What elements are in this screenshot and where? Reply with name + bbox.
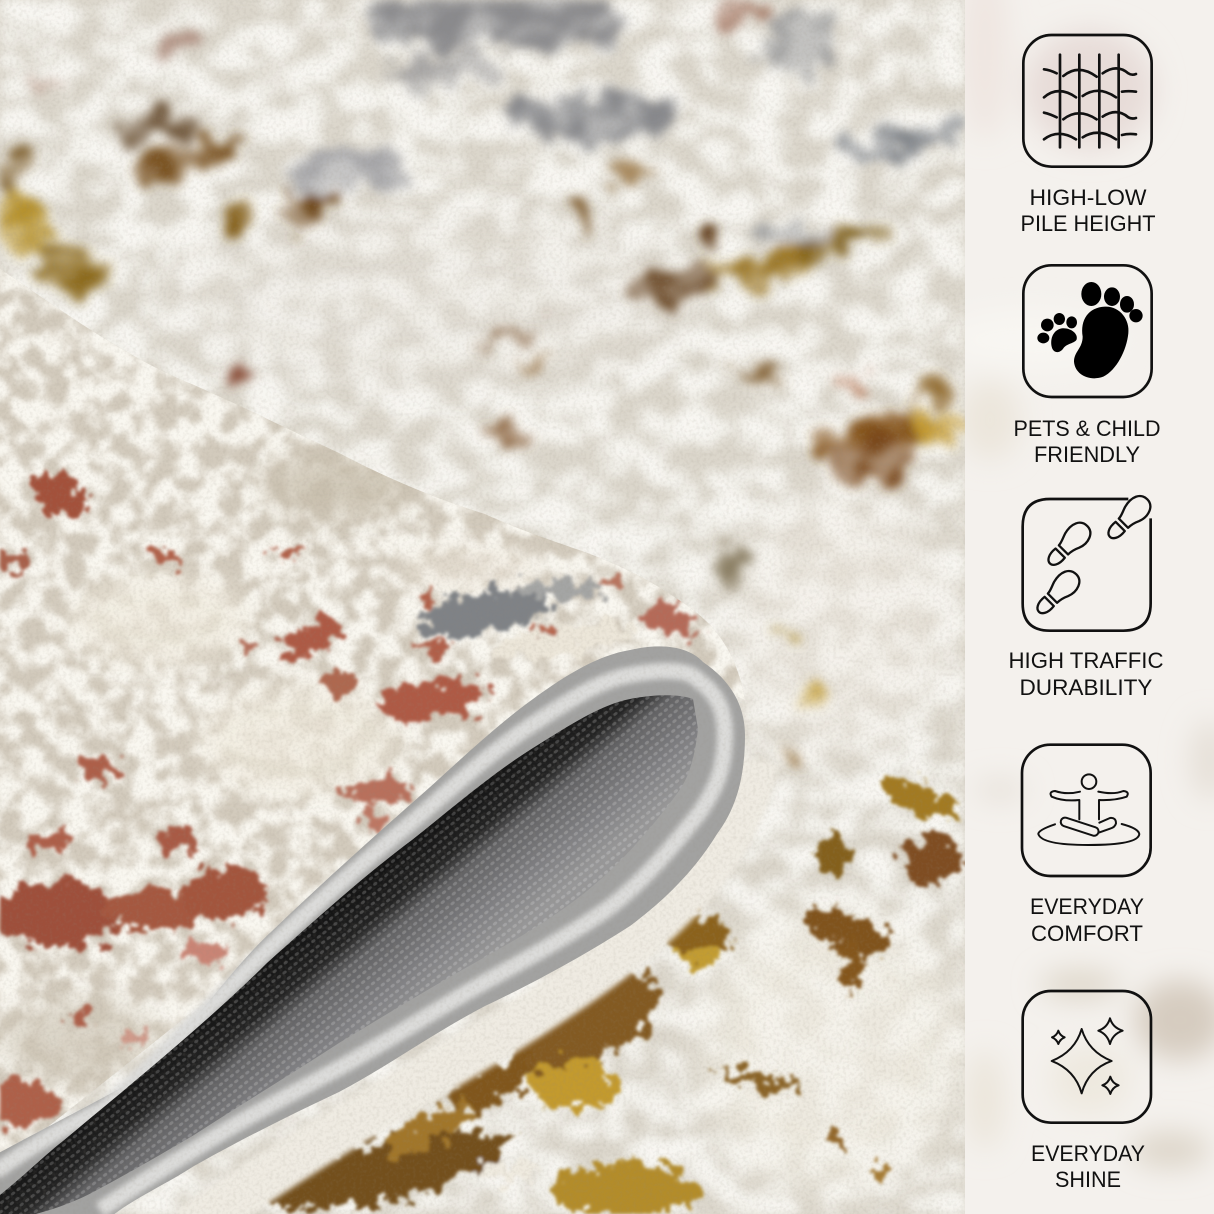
icon: footprints bbox=[1023, 491, 1155, 631]
woven grey rug backing bbox=[0, 695, 698, 1214]
rug pattern in the background, out of focus bbox=[0, 0, 966, 765]
fringe below the rolled edge bbox=[190, 760, 755, 1214]
mottled cream pile in the background bbox=[0, 0, 965, 1214]
label: EVERYDAY bbox=[1031, 1141, 1145, 1166]
silver binding around the rug edge bbox=[0, 646, 745, 1214]
label: EVERYDAY bbox=[1030, 894, 1144, 919]
feature: everyday shine: SHINE bbox=[1055, 1167, 1121, 1192]
icon: sparkles bbox=[1023, 991, 1151, 1123]
white flecks breaking up the far pattern bbox=[0, 0, 965, 765]
feature: high traffic durability bbox=[1008, 491, 1164, 700]
feature: high-low pile height: PILE HEIGHT bbox=[1020, 211, 1156, 236]
feature: everyday comfort bbox=[1022, 745, 1151, 946]
label: PETS & CHILD bbox=[1014, 416, 1160, 441]
label: HIGH TRAFFIC bbox=[1008, 648, 1164, 673]
binding highlight bbox=[0, 671, 725, 1210]
feature: pets and child friendly bbox=[1014, 265, 1160, 467]
panel: feature column bbox=[965, 4, 1214, 1187]
rug pattern in the foreground bbox=[256, 770, 963, 1214]
feature: pets and child friendly: FRIENDLY bbox=[1034, 442, 1140, 467]
lighter pile towards the camera bbox=[697, 512, 958, 1190]
feature: everyday shine bbox=[1023, 991, 1151, 1192]
photo: rolled rug corner bbox=[0, 0, 966, 1214]
feature: everyday comfort: COMFORT bbox=[1031, 921, 1143, 946]
pile texture bbox=[0, 0, 965, 1214]
feature: high-low pile height bbox=[1020, 35, 1156, 236]
rug pile surface, rolled over bbox=[0, 255, 770, 1175]
icon: paw and foot bbox=[1023, 265, 1152, 397]
icon: pile lines bbox=[1023, 35, 1152, 167]
label: HIGH-LOW bbox=[1030, 185, 1147, 210]
icon: seated figure bbox=[1022, 745, 1151, 876]
feature: high traffic durability: DURABILITY bbox=[1020, 675, 1153, 700]
